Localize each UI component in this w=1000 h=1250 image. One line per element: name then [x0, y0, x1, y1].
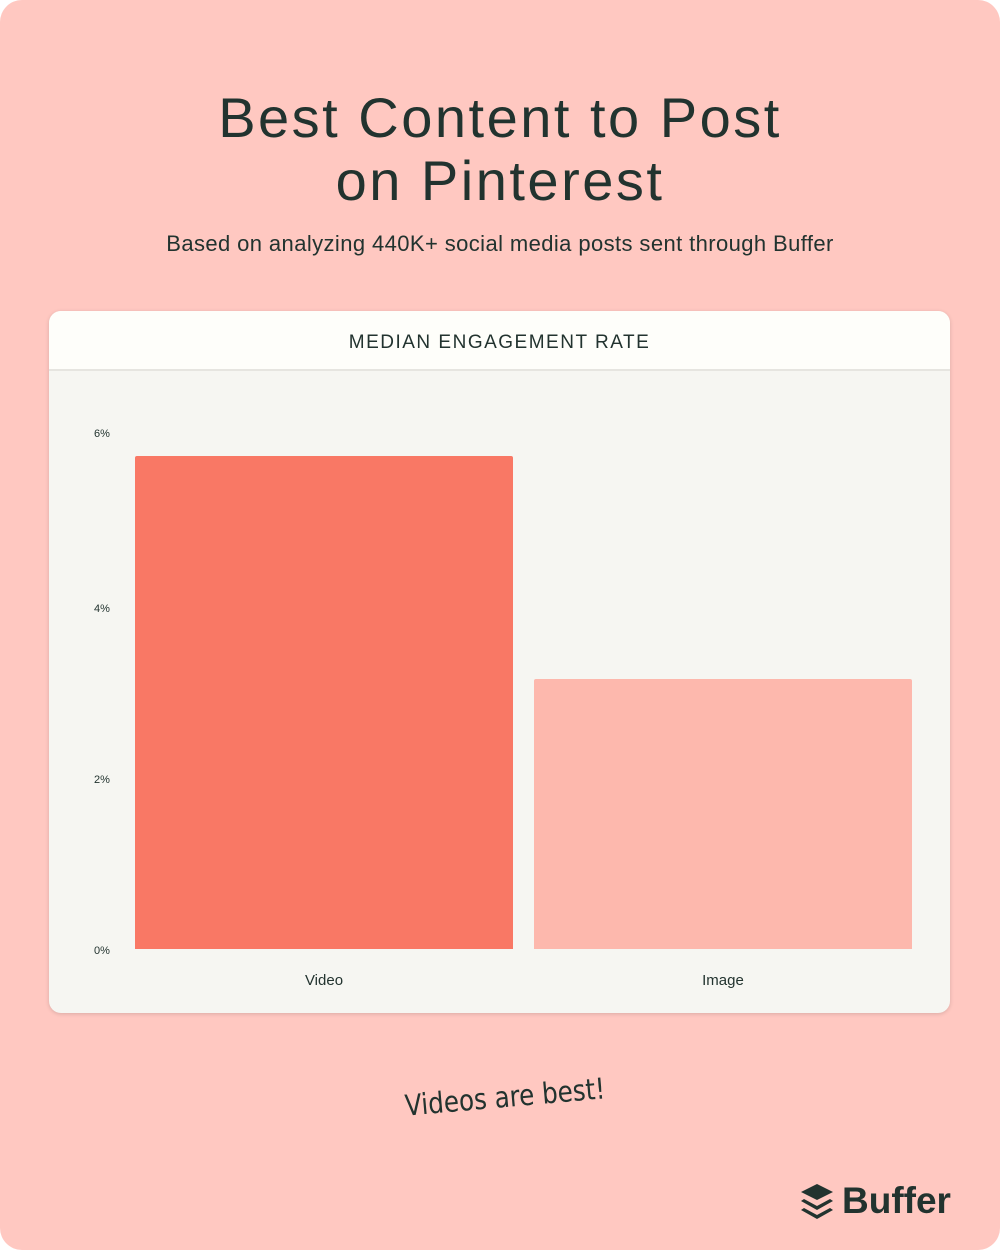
title: Best Content to Post	[218, 86, 782, 149]
chart heading	[49, 311, 950, 371]
subtitle: Based on analyzing 440K+ social media posts sent through Buffer	[166, 231, 834, 256]
title: on Pinterest	[336, 149, 664, 212]
y-axis labels: 0%	[94, 945, 110, 957]
bar: video	[135, 456, 513, 949]
callout: Videos are best!	[404, 1071, 606, 1123]
y-axis labels: 2%	[94, 774, 110, 786]
panel: chart card	[49, 311, 950, 1013]
title	[218, 86, 782, 212]
bar: image	[534, 679, 912, 949]
y-axis labels: 4%	[94, 603, 110, 615]
x label: video: Video	[305, 972, 343, 989]
logo: Buffer: Buffer	[842, 1180, 951, 1221]
y-axis labels	[94, 428, 110, 957]
y-axis labels: 6%	[94, 428, 110, 440]
bar chart	[94, 428, 912, 989]
icon: layers	[801, 1184, 833, 1219]
chart heading: MEDIAN ENGAGEMENT RATE	[349, 332, 650, 353]
x label: image: Image	[702, 972, 744, 989]
